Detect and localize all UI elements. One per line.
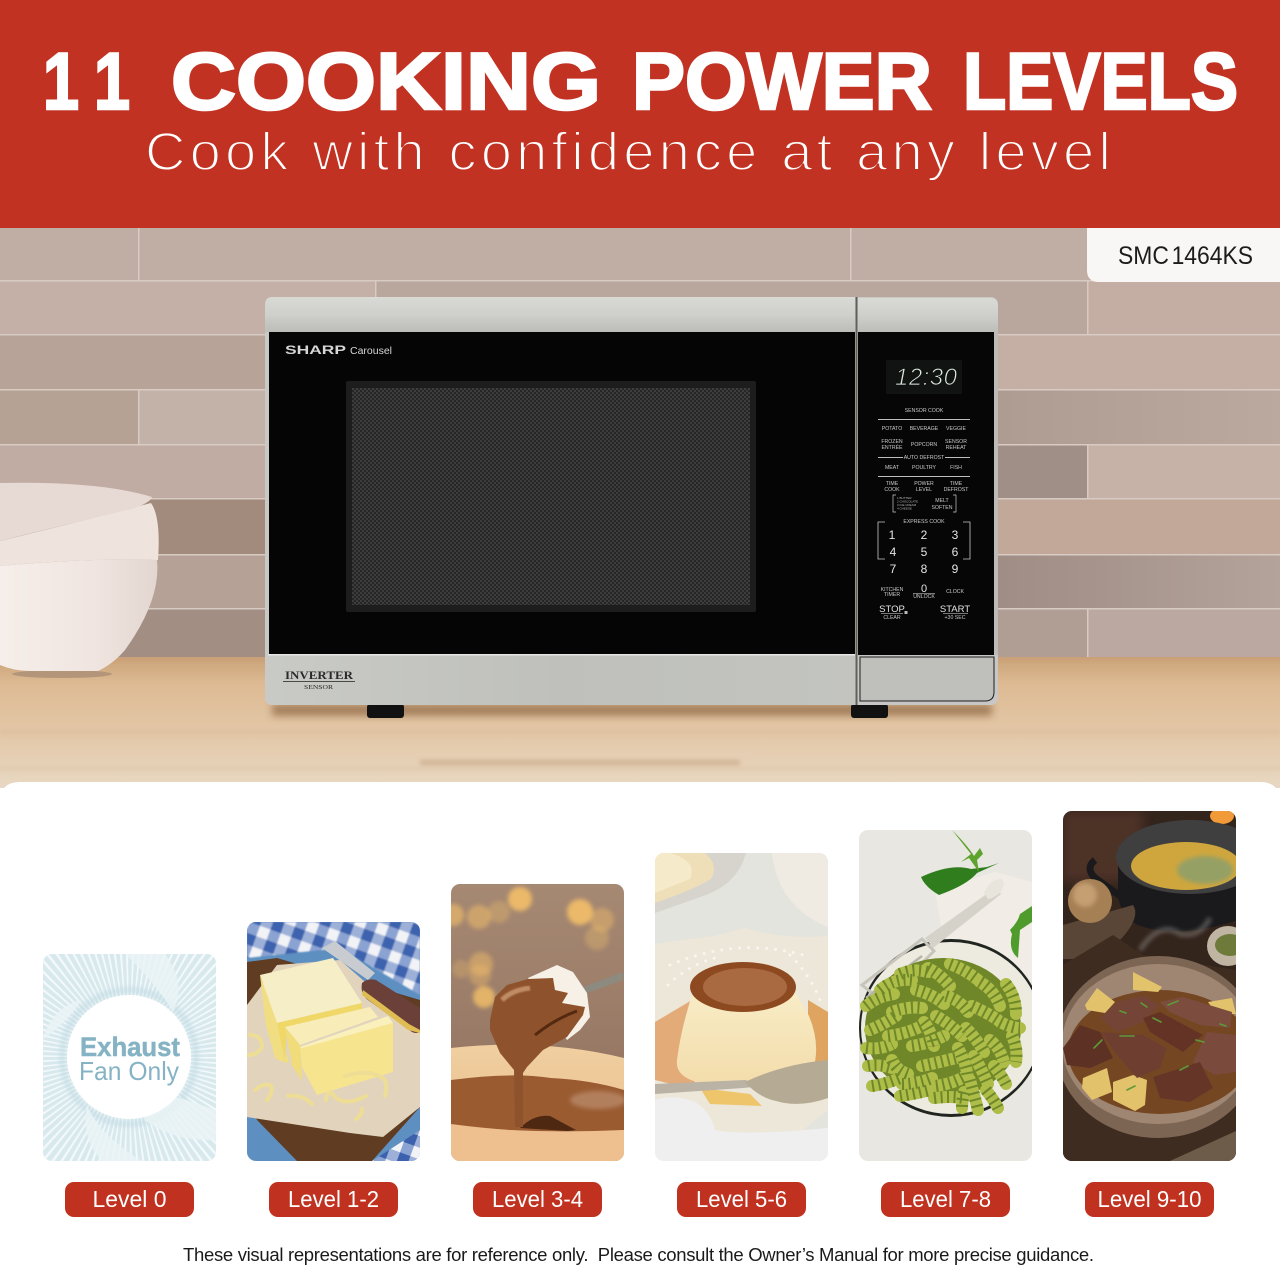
marshmallow and fork <box>528 965 623 1040</box>
button labels: CLEAR <box>883 615 901 621</box>
button labels: SENSOR COOK <box>905 408 944 414</box>
swirl wedges <box>43 954 216 1161</box>
button labels: LEVEL <box>916 487 932 493</box>
fan only label: Fan Only <box>79 1056 179 1086</box>
title: 1 <box>94 37 130 127</box>
spoon <box>655 1060 828 1104</box>
fusilli pasta <box>865 958 1021 1110</box>
wooden counter <box>0 657 1280 788</box>
button labels: 2 <box>921 528 928 542</box>
button labels: MEAT <box>885 465 900 471</box>
button labels: START <box>940 604 970 615</box>
button labels: FROZEN <box>881 439 903 445</box>
subtitle: Cook with confidence at any level <box>145 122 1115 182</box>
card: level 1-2 butter <box>247 922 420 1161</box>
button labels: AUTO DEFROST <box>904 455 945 461</box>
button labels: MELT <box>935 498 950 504</box>
wooden table <box>1063 935 1236 1161</box>
chocolate pool <box>451 1075 624 1131</box>
pill: level 7-8 <box>881 1182 1010 1217</box>
button labels: DEFROST <box>944 487 969 493</box>
digital clock: 12:30 <box>895 364 958 391</box>
linen napkin <box>935 872 1032 987</box>
button labels: +30 SEC <box>945 615 966 621</box>
potatoes <box>1082 972 1236 1111</box>
inverter badge: SENSOR <box>304 685 333 691</box>
card: level 7-8 pesto pasta <box>859 830 1043 1161</box>
model tag: SMC1464KS <box>1118 242 1253 270</box>
pill: level 7-8: Level 7-8 <box>900 1186 991 1212</box>
background plates <box>655 853 828 927</box>
button labels: 6 <box>952 545 959 559</box>
level labels <box>65 1182 1214 1217</box>
beef chunks <box>1063 995 1236 1102</box>
knife <box>322 941 375 980</box>
header banner <box>0 0 1280 228</box>
butter block <box>260 958 362 1023</box>
button labels: POWER <box>914 481 934 487</box>
button labels <box>878 408 970 621</box>
button labels: REHEAT <box>946 445 967 451</box>
pill: level 0 <box>65 1182 194 1217</box>
inverter badge: INVERTER <box>285 670 354 682</box>
brand logo: SHARP <box>285 345 346 357</box>
radial halftone spokes <box>43 954 216 1161</box>
pill: level 1-2: Level 1-2 <box>288 1186 379 1212</box>
chocolate coated marshmallow <box>490 978 585 1127</box>
button labels: 2 CHOCOLATE <box>897 500 918 504</box>
pill: level 5-6 <box>677 1182 806 1217</box>
door body <box>265 297 998 705</box>
lower white panel <box>0 782 1280 1280</box>
button labels: 5 <box>921 545 928 559</box>
flan body <box>677 992 816 1088</box>
card: level 9-10 beef stew <box>1056 808 1264 1161</box>
stacked bowls <box>0 483 159 678</box>
door release button <box>860 657 994 701</box>
button labels: TIME <box>950 481 963 487</box>
black door glass <box>269 332 855 655</box>
basil leaves <box>921 830 1032 958</box>
button labels: SENSOR <box>945 439 967 445</box>
stew pot <box>1090 820 1264 931</box>
footer disclaimer: These visual representations are for reference only. Please consult the Owner’s Manual for more precise guidance. <box>183 1244 1094 1265</box>
kitchen scene <box>0 228 1280 788</box>
caramel top <box>690 962 796 1012</box>
pill: level 9-10: Level 9-10 <box>1098 1186 1202 1212</box>
title: COOKING <box>171 37 601 127</box>
title: LEVELS <box>963 37 1238 127</box>
butter shavings <box>248 1035 386 1119</box>
button labels: VEGGIE <box>946 426 966 432</box>
bottom trim <box>266 656 706 705</box>
shadow and feet <box>272 704 992 718</box>
lace plate <box>655 928 828 1140</box>
title: POWER <box>632 37 932 127</box>
button labels: BEVERAGE <box>910 426 939 432</box>
button labels: EXPRESS COOK <box>903 519 945 525</box>
button labels: CLOCK <box>946 589 964 595</box>
top trim <box>265 297 855 332</box>
side dish <box>1207 926 1249 966</box>
fan circle <box>67 995 191 1119</box>
button labels: TIME <box>886 481 899 487</box>
digital clock <box>886 360 962 394</box>
card: level 0 exhaust fan only <box>43 954 216 1161</box>
candle glow <box>1210 808 1234 824</box>
button labels: STOP <box>879 604 905 615</box>
steam <box>1140 918 1210 950</box>
button labels: 7 <box>890 562 897 576</box>
pill: level 3-4 <box>473 1182 602 1217</box>
pill: level 5-6: Level 5-6 <box>696 1186 787 1212</box>
button labels: ENTRÉE <box>881 444 903 451</box>
button labels: POTATO <box>882 426 902 432</box>
pill: level 0: Level 0 <box>92 1186 166 1212</box>
brand logo: Carousel <box>350 346 392 357</box>
ceramic bowl <box>451 1045 624 1161</box>
button labels: 4 CHEESE <box>897 506 912 510</box>
brand logo <box>286 346 392 354</box>
card: level 3-4 melted chocolate <box>442 884 626 1161</box>
stew plate <box>1056 956 1260 1138</box>
fork <box>862 879 1004 1004</box>
microwave <box>265 297 998 718</box>
plate <box>859 939 1043 1117</box>
button labels: 4 <box>890 545 897 559</box>
button labels: 0 <box>921 583 927 595</box>
pill: level 3-4: Level 3-4 <box>492 1186 583 1212</box>
button labels: KITCHEN <box>881 587 904 593</box>
title: 1 <box>43 37 79 127</box>
model tag <box>1087 228 1280 282</box>
door window <box>346 381 756 612</box>
napkin <box>655 1097 828 1161</box>
bread bun <box>1063 879 1135 959</box>
button labels: 1 <box>889 528 896 542</box>
exhaust label: Exhaust <box>80 1032 180 1062</box>
button labels: 3 <box>952 528 959 542</box>
tile wall <box>0 228 1280 660</box>
gingham cloth <box>247 922 420 995</box>
button labels: POPCORN <box>911 442 937 448</box>
button labels: SOFTEN <box>931 505 953 511</box>
button labels: COOK <box>884 487 900 493</box>
button labels: FISH <box>950 465 962 471</box>
control panel <box>856 297 998 705</box>
title <box>43 37 1238 127</box>
button labels: POULTRY <box>912 465 937 471</box>
card: level 5-6 flan <box>655 853 828 1161</box>
caramel sauce <box>655 1000 695 1090</box>
bokeh lights <box>442 887 614 1008</box>
pill: level 9-10 <box>1085 1182 1214 1217</box>
wooden board <box>247 958 420 1161</box>
bowl front rim <box>451 1124 624 1161</box>
button labels: 8 <box>921 562 928 576</box>
lace dots <box>668 948 820 1000</box>
button labels: 3 ICE CREAM <box>897 503 917 507</box>
button labels: UNLOCK <box>913 594 935 600</box>
inverter badge <box>283 672 355 689</box>
pill: level 1-2 <box>269 1182 398 1217</box>
button labels: TIMER <box>884 592 900 598</box>
button labels: 9 <box>952 562 959 576</box>
parchment paper <box>247 960 420 1137</box>
button labels: 1 BUTTER <box>897 496 912 500</box>
